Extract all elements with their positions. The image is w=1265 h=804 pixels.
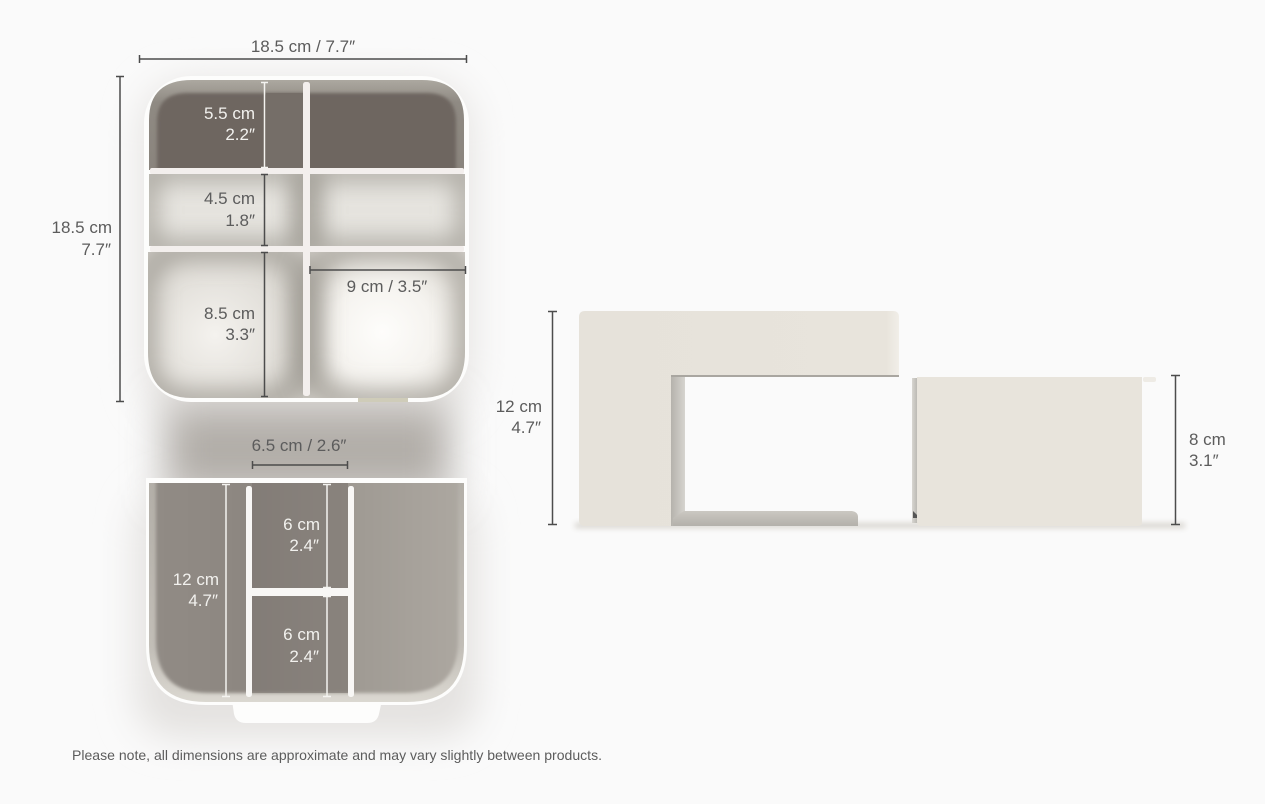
bottom compartment row <box>144 248 468 402</box>
dimension: 4.5 cm compartment: 4.5 cm <box>204 189 255 208</box>
handle <box>232 700 382 723</box>
dimension: 5.5 cm compartment: 5.5 cm <box>204 104 255 123</box>
inner return wall <box>671 376 685 526</box>
tray shadows <box>135 80 1185 738</box>
dimension: 6 cm upper compartment: 6 cm <box>283 515 320 534</box>
dimension: 4.5 cm compartment <box>204 174 268 246</box>
vertical divider <box>303 82 310 396</box>
panel: side view L-shaped organiser <box>579 311 899 526</box>
tray inner wall <box>149 483 464 702</box>
dimension: 8.5 cm compartment <box>204 252 268 397</box>
dimension: 9 cm compartment width <box>310 266 466 296</box>
tab <box>1143 377 1156 382</box>
dimension: 6 cm lower compartment <box>283 596 331 697</box>
dimension: overall width top tray <box>139 37 467 63</box>
dimension: 8.5 cm compartment: 8.5 cm <box>204 304 255 323</box>
box body <box>917 377 1142 526</box>
dimension: 12 cm side height: 12 cm <box>496 397 542 416</box>
dimension: 12 cm bottom tray: 12 cm <box>173 570 219 589</box>
panel: top-view tray with six compartments <box>144 76 469 402</box>
upper horizontal divider <box>150 168 464 174</box>
dimension: 9 cm compartment width: 9 cm / 3.5″ <box>347 277 427 296</box>
tray outer rim <box>144 76 469 402</box>
dimension: 12 cm side height <box>496 311 557 525</box>
dimension: 8 cm box height <box>1171 375 1226 525</box>
base plate <box>673 511 858 526</box>
dimension: overall depth top tray <box>52 76 124 402</box>
dimension: 6 cm upper compartment <box>283 484 331 588</box>
dimension: 8 cm box height: 8 cm <box>1189 430 1226 449</box>
dimension: 6.5 cm centre width: 6.5 cm / 2.6″ <box>252 436 346 455</box>
top compartment floor <box>157 93 456 175</box>
panel: bottom-view tray <box>146 478 467 723</box>
dimension: 6.5 cm centre width <box>252 436 348 469</box>
dimension: 6 cm lower compartment: 2.4″ <box>289 647 319 666</box>
top compartment wall <box>149 80 464 170</box>
L-shaped body <box>579 311 899 526</box>
panel: side view box <box>912 377 1156 526</box>
underside line <box>671 375 899 377</box>
tray floor <box>156 478 458 693</box>
middle compartment row <box>149 174 465 246</box>
left edge <box>912 378 918 523</box>
dimension: 8.5 cm compartment: 3.3″ <box>225 325 255 344</box>
notch <box>913 511 917 518</box>
tray outer rim <box>146 478 467 705</box>
dimension: overall depth top tray: 7.7″ <box>81 240 111 259</box>
left divider <box>246 486 252 697</box>
dimension: 5.5 cm compartment <box>204 82 268 168</box>
footnote: Please note, all dimensions are approximate and may vary slightly between products. <box>72 747 602 763</box>
right divider <box>348 486 354 697</box>
dimension: 5.5 cm compartment: 2.2″ <box>225 125 255 144</box>
dimension: 6 cm upper compartment: 2.4″ <box>289 536 319 555</box>
label tag <box>358 398 408 402</box>
lower horizontal divider <box>150 246 464 252</box>
dimension: overall depth top tray: 18.5 cm <box>52 218 112 237</box>
dimension: 12 cm side height: 4.7″ <box>511 418 541 437</box>
dimension: 8 cm box height: 3.1″ <box>1189 451 1219 470</box>
dimension: overall width top tray: 18.5 cm / 7.7″ <box>251 37 355 56</box>
dimension: 6 cm lower compartment: 6 cm <box>283 625 320 644</box>
dimension: 12 cm bottom tray: 4.7″ <box>188 591 218 610</box>
dimension: 4.5 cm compartment: 1.8″ <box>225 211 255 230</box>
dimension: 12 cm bottom tray <box>173 484 230 697</box>
cross divider <box>250 588 350 596</box>
